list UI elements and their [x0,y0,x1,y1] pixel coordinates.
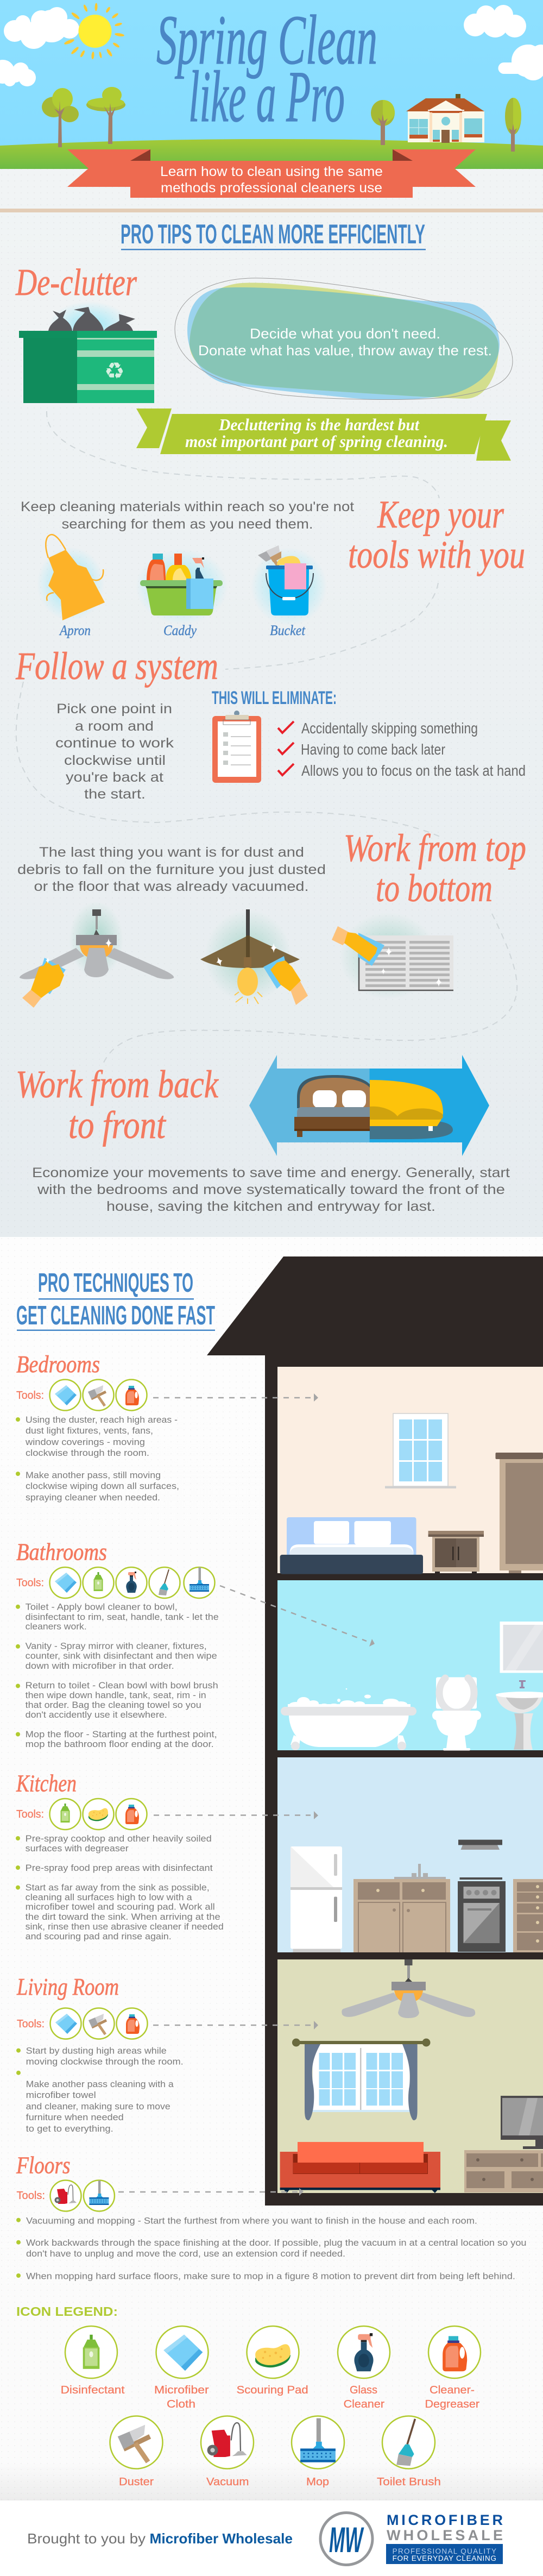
room: living room [277,1959,543,2193]
legend item: mop: Mop [306,2476,329,2488]
tools row: bathrooms [16,1567,215,1598]
illustration: house [406,94,484,143]
legend item: cleaner-degreaser: Degreaser [425,2398,479,2410]
bullet list: bathrooms: then wipe down handle, tank, seat, rim - in [26,1691,206,1700]
legend item: duster: Duster [119,2476,154,2488]
legend item: toilet brush: Toilet Brush [377,2476,441,2488]
bullet list: floors: Work backwards through the space finishing at the door. If possible, plug the vacuum in at a central location so you [26,2238,527,2248]
logo: MW ring: MW [329,2520,364,2560]
bullet list: floors: Vacuuming and mopping - Start the furthest from where you want to finish in the house and each room. [26,2216,477,2226]
legend item: mop [292,2416,344,2488]
bullet list: kitchen: sink, rinse then use abrasive cleaner if needed [26,1922,224,1932]
heading: pro techniques: GET CLEANING DONE FAST [16,1301,215,1330]
path: dashed connector 2 [225,583,438,669]
legend item: microfiber cloth: Microfiber [154,2384,209,2396]
icon: caddy [136,549,228,625]
heading: work from back to front: Work from back [16,1063,219,1106]
bullet list: bathrooms: Mop the floor - Starting at the furthest point, [26,1730,217,1739]
bullet list: bathrooms: Return to toilet - Clean bowl with bowl brush [26,1681,218,1691]
tools row: living room [17,2008,148,2039]
arrow: kitchen [154,1811,318,1819]
icon: hanging lamp with glove [200,909,308,1005]
page background lower section [0,1237,543,2500]
bullet list: living room: moving clockwise through the room. [26,2057,184,2067]
title [156,1,377,137]
ribbon: decluttering note: most important part of spring cleaning. [185,432,448,451]
tools row: floors: Tools: [16,2190,45,2202]
legend item: vacuum: Vacuum [206,2476,249,2488]
heading: floors: Floors [16,2152,71,2179]
checklist [278,720,526,779]
heading: keep your tools with you [348,493,525,576]
text: keep cleaning materials: searching for them as you need them. [62,517,313,532]
text: economize your movements [32,1165,510,1214]
footer text: Microfiber Wholesale [150,2530,293,2547]
tools row: living room: Tools: [17,2018,45,2030]
tools row: kitchen: Tools: [16,1808,44,1820]
arrow: bathrooms [220,1586,375,1647]
text: economize your movements: house, saving the kitchen and entryway for last. [106,1199,435,1214]
text: pick one point: continue to work [55,736,174,751]
bullet list: living room: and cleaner, making sure to move [26,2102,171,2112]
heading: icon legend: ICON LEGEND: [16,2304,118,2319]
heading: pro techniques: PRO TECHNIQUES TO [38,1268,193,1298]
heading: living room: Living Room [16,1974,119,2000]
path: dashed connector 1 [47,411,439,498]
icon: bucket [251,545,327,626]
bullet list: bathrooms: disinfectant to rim, seat, handle, tank - let the [26,1612,219,1622]
bullet list: kitchen: Pre-spray cooktop and other heavily soiled [26,1834,212,1844]
icon: apron [37,535,105,621]
logo: wordmark: WHOLESALE [387,2527,503,2543]
bullet list: kitchen [16,1834,224,1942]
bullet list: bedrooms: spraying cleaner when needed. [26,1493,160,1503]
bullet list: bedrooms: clockwise wiping down all surfaces, [26,1481,179,1491]
bullet list: living room [16,2046,184,2134]
text: pick one point: Pick one point in [56,701,172,717]
bullet list: bathrooms: that order. Bag the cleaning towel so you [26,1700,201,1710]
footer text: Brought to you by [27,2530,146,2547]
callout: decide blob [175,278,513,400]
bullet list: bathrooms: cleaners work. [26,1622,87,1632]
footer text [27,2530,293,2547]
tools row: bathrooms: Tools: [16,1577,44,1589]
logo: wordmark [386,2512,503,2564]
heading: work from top to bottom [344,826,526,910]
illustration: trees [42,87,521,152]
legend item: scouring pad: Scouring Pad [237,2384,308,2396]
text: keep cleaning materials: Keep cleaning materials within reach so you're not [21,499,354,514]
text: pick one point [55,701,174,802]
logo: MW ring [320,2513,372,2565]
ribbon: decluttering note [136,409,511,461]
bullet list: living room: microfiber towel [26,2090,96,2100]
legend item: toilet brush [377,2416,441,2488]
text: the last thing: debris to fall on the furniture you just dusted [17,862,326,877]
bullet list: bedrooms [16,1415,179,1503]
bullet list: bathrooms: mop the bathroom floor ending at the door. [26,1739,214,1749]
icon: ceiling fan with glove [20,902,174,1008]
text: the last thing [17,845,326,894]
path: dashed connector 3 [16,682,440,837]
heading: kitchen: Kitchen [16,1770,77,1797]
bullet list: floors: don't have to unplug and move the cord, use an extension cord if needed. [26,2249,345,2259]
illustration: grass hill [0,139,543,169]
icon: recycling bin with trash bags [19,301,157,403]
ribbon: decluttering note: Decluttering is the hardest but [218,415,420,434]
tools row: bedrooms: Tools: [16,1390,44,1402]
heading: bathrooms: Bathrooms [16,1538,107,1566]
room: bedroom [277,1367,543,1574]
arrow: living room [153,2021,318,2030]
legend item: microfiber cloth: Cloth [167,2398,195,2410]
logo: wordmark: FOR EVERYDAY CLEANING [393,2554,496,2562]
heading: pro techniques [16,1268,215,1331]
text: the last thing: or the floor that was already vacuumed. [34,879,308,894]
checklist: Having to come back later [301,741,445,758]
legend item: cleaner-degreaser [425,2326,481,2410]
bullet list: living room: Start by dusting high areas while [26,2046,167,2056]
panel: living room [16,1974,184,2134]
bullet list: bedrooms: Make another pass, still moving [26,1471,161,1480]
bullet list: floors [16,2216,527,2282]
bullet list: kitchen: Start as far away from the sink as possible, [26,1883,210,1893]
legend item: glass cleaner: Glass [350,2384,377,2396]
panel: bathrooms [16,1538,219,1749]
heading: follow a system: Follow a system [15,644,218,688]
arrow: floors [118,2188,304,2196]
bullet list: living room: Make another pass cleaning with a [26,2079,174,2089]
double arrow with bed and sofa [249,1055,489,1156]
text: keep cleaning materials [21,499,354,532]
legend item: disinfectant [61,2326,125,2396]
heading: bedrooms: Bedrooms [16,1351,100,1378]
callout: decide blob: Decide what you don't need. [250,325,440,342]
illustration: clouds [0,5,543,86]
text: pick one point: clockwise until [64,753,166,768]
room: kitchen [277,1757,543,1952]
logo: wordmark: MICROFIBER [387,2512,503,2528]
text: pick one point: a room and [75,719,154,734]
tools row: bedrooms [16,1380,147,1410]
legend item: scouring pad [237,2326,308,2396]
legend item: cleaner-degreaser: Cleaner- [430,2384,475,2396]
ribbon banner with subtitle: methods professional cleaners use [161,180,382,196]
bullet list: floors: When mopping hard surface floors, make sure to mop in a figure 8 motion to prevent dirt from being left behind. [26,2272,515,2282]
panel: bedrooms [16,1351,179,1503]
legend item: disinfectant: Disinfectant [61,2384,125,2396]
illustration: sun [64,3,124,59]
header sky background [0,0,543,169]
text: economize your movements: Economize your movements to save time and energy. Generally, start [32,1165,510,1180]
bullet list: bathrooms: Vanity - Spray mirror with cleaner, fixtures, [26,1642,207,1651]
bullet list: bathrooms: Toilet - Apply bowl cleaner to bowl, [26,1603,178,1612]
house structure [207,1256,543,2206]
footer background [0,2500,543,2576]
icon: clipboard [212,711,261,783]
bullet list: kitchen: the dirt toward the sink. When arriving at the [26,1912,220,1922]
ribbon banner with subtitle: Learn how to clean using the same [160,164,383,179]
legend item: vacuum [201,2416,254,2488]
text: pick one point: the start. [84,787,146,802]
icon: recycling bin with trash bags: ♻ [104,357,125,384]
text: economize your movements: with the bedrooms and move systematically toward the front of the [37,1182,505,1197]
bullet list: bathrooms [16,1603,219,1749]
heading: work from top to bottom: to bottom [376,866,493,910]
tools row: kitchen [16,1799,147,1830]
page background upper section [0,169,543,1237]
bullet list: kitchen: and scouring pad and rinse again. [26,1932,172,1942]
tools row: floors [16,2181,115,2211]
bullet list: bathrooms: counter, sink with disinfectant and then wipe [26,1651,217,1661]
path: dashed connector 4 [103,914,517,1065]
text: the last thing: The last thing you want is for dust and [39,845,304,860]
heading: De-clutter: De-clutter [15,262,137,304]
label: Caddy: Caddy [163,623,197,638]
bullet list: bedrooms: Using the duster, reach high areas - [26,1415,178,1425]
logo: wordmark: PROFESSIONAL QUALITY [393,2547,496,2555]
icon: air vent with glove [332,913,453,1000]
arrow: bedrooms [153,1393,318,1402]
title: like a Pro [188,56,345,137]
callout: decide blob: Donate what has value, throw away the rest. [198,342,492,359]
bullet list: bedrooms: window coverings - moving [25,1437,145,1447]
checklist: Accidentally skipping something [301,720,478,737]
bullet list: bathrooms: down with microfiber in that order. [26,1661,174,1671]
label: Bucket: Bucket [270,623,306,638]
heading: keep your tools with you: Keep your [377,493,504,536]
label: Apron: Apron [59,623,91,638]
panel: kitchen [16,1770,224,1942]
bullet list: kitchen: cleaning all surfaces high to low with a [26,1893,193,1902]
text: pick one point: you're back at [66,770,163,785]
heading: work from back to front: to front [68,1103,167,1147]
legend item: duster [110,2416,163,2488]
bullet list: kitchen: Pre-spray food prep areas with disinfectant [26,1863,213,1873]
title: Spring Clean [156,1,377,79]
legend item: glass cleaner [338,2326,390,2410]
heading: this will eliminate: THIS WILL ELIMINATE: [212,688,337,708]
bullet list: bedrooms: dust light fixtures, vents, fans, [26,1426,153,1436]
bullet list: bathrooms: don't accidently use it elsewhere. [26,1710,167,1720]
legend item: glass cleaner: Cleaner [344,2398,384,2410]
bullet list: kitchen: microfiber towel and scouring pad. Work all [26,1902,215,1912]
bullet list: bedrooms: clockwise through the room. [26,1448,149,1458]
bullet list: living room: to get to everything. [26,2124,113,2134]
legend item: microfiber cloth [154,2326,209,2410]
heading: work from back to front [16,1063,219,1147]
bullet list: kitchen: surfaces with degreaser [26,1844,129,1854]
beige divider stripe [0,209,543,212]
ribbon banner with subtitle [67,149,476,198]
room: bathroom [277,1580,543,1750]
panel: floors [16,2152,527,2282]
bullet list: living room: furniture when needed [26,2113,124,2122]
